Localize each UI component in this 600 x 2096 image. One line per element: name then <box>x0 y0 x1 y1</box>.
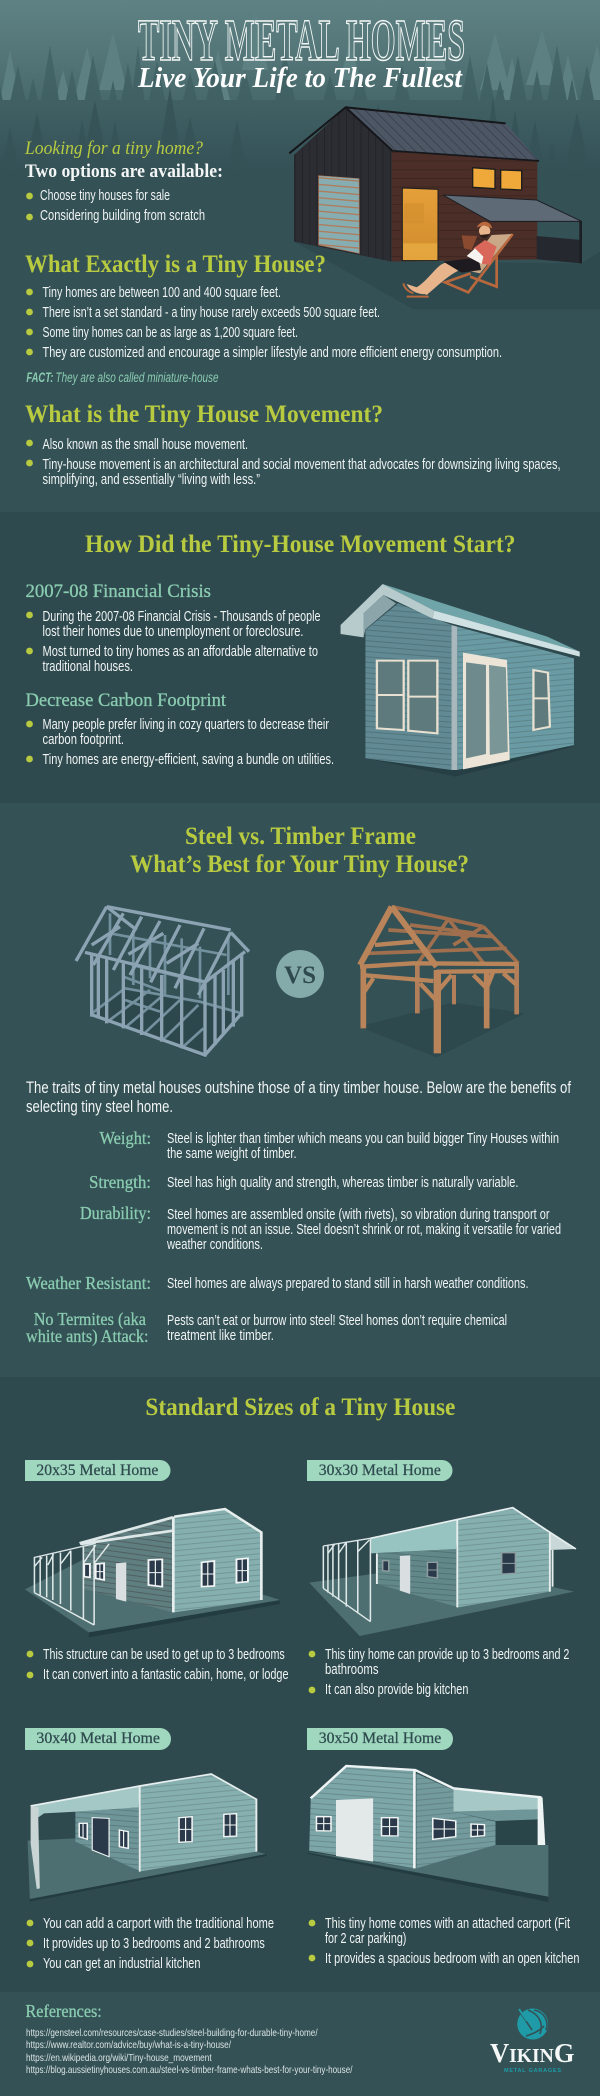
subtitle: Live Your Life to The Fullest <box>137 62 463 94</box>
logo emblem <box>517 2008 548 2040</box>
list: financial crisis: Most turned to tiny homes as an affordable alternative to <box>42 644 318 660</box>
ground shadow <box>294 242 600 309</box>
intro statement: Two options are available: <box>25 161 223 182</box>
benefit: strength <box>89 1172 518 1192</box>
list <box>309 1916 579 1967</box>
logo tagline: METAL GARAGES <box>504 2068 561 2074</box>
benefit: no termites: white ants) Attack: <box>26 1326 148 1347</box>
illustration <box>25 1509 280 1637</box>
illustration: timber frame <box>358 907 525 1057</box>
list: tiny house facts <box>26 285 502 361</box>
list: movement: Also known as the small house movement. <box>42 437 248 453</box>
list: carbon: Many people prefer living in cozy quarters to decrease their <box>42 717 329 733</box>
forest silhouette <box>0 2 600 185</box>
book <box>462 235 477 250</box>
corner post <box>452 625 457 770</box>
list: tiny house facts: Some tiny homes can be as large as 1,200 square feet. <box>42 325 298 341</box>
list: bathrooms <box>325 1662 378 1678</box>
list: tiny house facts: There isn’t a set standard - a tiny house rarely exceeds 500 square feet. <box>42 305 380 321</box>
illustration <box>306 1766 548 1902</box>
panel: references and logo <box>0 1992 600 2096</box>
fact note: FACT: <box>26 370 53 385</box>
list: movement: simplifying, and essentially “living with less.” <box>42 472 260 488</box>
benefit: no termites: treatment like timber. <box>167 1328 274 1344</box>
label pill: 20x35 Metal Home <box>36 1462 159 1479</box>
fact note: They are also called miniature-house <box>56 370 218 385</box>
hero sky background <box>0 0 600 512</box>
carport post <box>579 221 582 263</box>
intro paragraph <box>26 1079 571 1116</box>
list: options: Choose tiny houses for sale <box>40 188 170 204</box>
ground shadow <box>358 1002 525 1057</box>
heading: Standard Sizes of a Tiny House <box>145 1394 455 1421</box>
illustration: steel frame <box>76 907 249 1058</box>
list: financial crisis: During the 2007-08 Financial Crisis - Thousands of people <box>42 609 320 625</box>
list: carbon: carbon footprint. <box>42 732 124 748</box>
back beams <box>368 919 518 965</box>
flip flops <box>403 283 429 297</box>
benefit: strength: Strength: <box>89 1172 151 1192</box>
benefit: weight <box>100 1128 559 1162</box>
benefit: weather resistant: Weather Resistant: <box>26 1273 151 1293</box>
list of links: https://www.realtor.com/advice/buy/what-is-a-tiny-house/ <box>26 2039 231 2051</box>
badge: vs: VS <box>284 962 316 989</box>
list: financial crisis: lost their homes due to unemployment or foreclosure. <box>42 624 304 640</box>
gable wall <box>294 107 393 262</box>
benefit: durability <box>80 1203 561 1253</box>
windows <box>473 168 522 190</box>
list: tiny house facts: Tiny homes are between 100 and 400 square feet. <box>42 285 281 301</box>
gable wall <box>365 603 452 770</box>
list: financial crisis: traditional houses. <box>42 659 133 675</box>
roof edges <box>289 107 539 161</box>
panel: steel vs timber <box>26 823 571 1347</box>
list: This structure can be used to get up to 3 bedrooms <box>43 1647 285 1663</box>
head <box>479 225 490 237</box>
intro paragraph: selecting tiny steel home. <box>26 1098 173 1116</box>
benefit: durability: weather conditions. <box>166 1237 263 1253</box>
panel: hero and intro <box>0 0 600 512</box>
rear posts <box>417 963 517 1014</box>
icon: blue sided tiny house <box>341 584 580 777</box>
illustration <box>28 1774 267 1902</box>
glass door <box>402 188 438 261</box>
deck chair <box>445 234 513 292</box>
heading line 2: What’s Best for Your Tiny House? <box>130 851 469 878</box>
label pill: 30x40 Metal Home <box>36 1730 160 1747</box>
list: financial crisis <box>26 609 320 675</box>
panel background <box>0 512 600 803</box>
label pill <box>307 1460 452 1481</box>
benefit: durability: Durability: <box>80 1203 151 1223</box>
panel background <box>0 1377 600 1992</box>
list <box>27 1647 288 1683</box>
intro question: Looking for a tiny home? <box>24 138 203 159</box>
double hung windows <box>377 661 550 733</box>
list: It can convert into a fantastic cabin, home, or lodge <box>43 1667 288 1683</box>
man on deck chair <box>403 222 513 297</box>
badge: vs <box>276 950 324 998</box>
shorts <box>443 258 481 273</box>
soffit <box>364 595 396 637</box>
brown wall <box>392 152 537 262</box>
label pill <box>307 1728 453 1750</box>
side wall <box>457 627 574 770</box>
heading: what is a tiny house: What Exactly is a Tiny House? <box>25 251 326 278</box>
card: 20x35 metal home <box>25 1460 288 1683</box>
fascia <box>432 611 580 657</box>
roof <box>383 584 580 652</box>
benefit: weight: Weight: <box>100 1128 151 1148</box>
benefit: no termites <box>26 1309 507 1347</box>
subheading: carbon footprint: Decrease Carbon Footprint <box>26 690 227 711</box>
list: It can also provide big kitchen <box>325 1682 468 1698</box>
panel background <box>0 1992 600 2096</box>
roller door <box>319 176 359 253</box>
roof <box>346 107 539 161</box>
heading: tiny house movement: What is the Tiny House Movement? <box>25 401 383 428</box>
list: options <box>26 188 205 224</box>
card: 30x40 metal home <box>25 1728 274 1972</box>
subheading: financial crisis: 2007-08 Financial Crisis <box>26 581 211 602</box>
shadow <box>365 747 574 777</box>
legs <box>415 263 458 295</box>
label pill: 30x50 Metal Home <box>319 1730 441 1747</box>
carport dark wall <box>537 236 582 263</box>
panel: how the movement started <box>0 512 600 803</box>
floor shadow <box>91 988 242 1058</box>
front posts <box>363 965 487 1053</box>
benefit: weather resistant <box>26 1273 528 1293</box>
shirt <box>473 240 497 265</box>
list of links <box>26 2027 353 2076</box>
benefit: no termites: No Termites (aka <box>34 1309 146 1330</box>
label pill <box>25 1460 170 1481</box>
list of links: https://gensteel.com/resources/case-studies/steel-building-for-durable-tiny-home/ <box>26 2027 318 2039</box>
list: options: Considering building from scratch <box>40 208 205 224</box>
list <box>309 1647 569 1698</box>
list: for 2 car parking) <box>325 1931 406 1947</box>
french doors <box>463 653 510 769</box>
fact note <box>26 370 219 385</box>
heading: How Did the Tiny-House Movement Start? <box>85 531 516 558</box>
icon: black and brown tiny house with man on deck chair <box>289 107 600 309</box>
logo wordmark: VIKING <box>490 2038 574 2068</box>
list: movement <box>26 437 561 488</box>
list of links: https://en.wikipedia.org/wiki/Tiny-house_movement <box>26 2052 212 2064</box>
list: You can add a carport with the traditional home <box>43 1916 274 1932</box>
list of links: https://blog.aussietinyhouses.com.au/steel-vs-timber-frame-whats-best-for-your-tiny-house/ <box>26 2064 353 2076</box>
awning <box>443 195 582 221</box>
panel: standard sizes <box>0 1377 600 1992</box>
heading: references: References: <box>26 2001 102 2021</box>
benefit: weight: the same weight of timber. <box>167 1146 297 1162</box>
illustration <box>309 1508 576 1636</box>
label pill <box>25 1728 171 1750</box>
list: carbon <box>26 717 334 768</box>
list: You can get an industrial kitchen <box>43 1956 200 1972</box>
card: 30x30 metal home <box>307 1460 576 1698</box>
heading line 1: Steel vs. Timber Frame <box>185 823 416 850</box>
label pill: 30x30 Metal Home <box>319 1462 441 1479</box>
list: It provides up to 3 bedrooms and 2 bathrooms <box>43 1936 265 1952</box>
back studs <box>91 913 242 1047</box>
card: 30x50 metal home <box>306 1728 579 1967</box>
main beams <box>360 907 518 1002</box>
gable fascia <box>341 584 434 637</box>
list: carbon: Tiny homes are energy-efficient, saving a bundle on utilities. <box>42 752 334 768</box>
logo: viking metal garages <box>490 2008 574 2074</box>
list <box>27 1916 274 1972</box>
main members <box>76 907 249 1057</box>
